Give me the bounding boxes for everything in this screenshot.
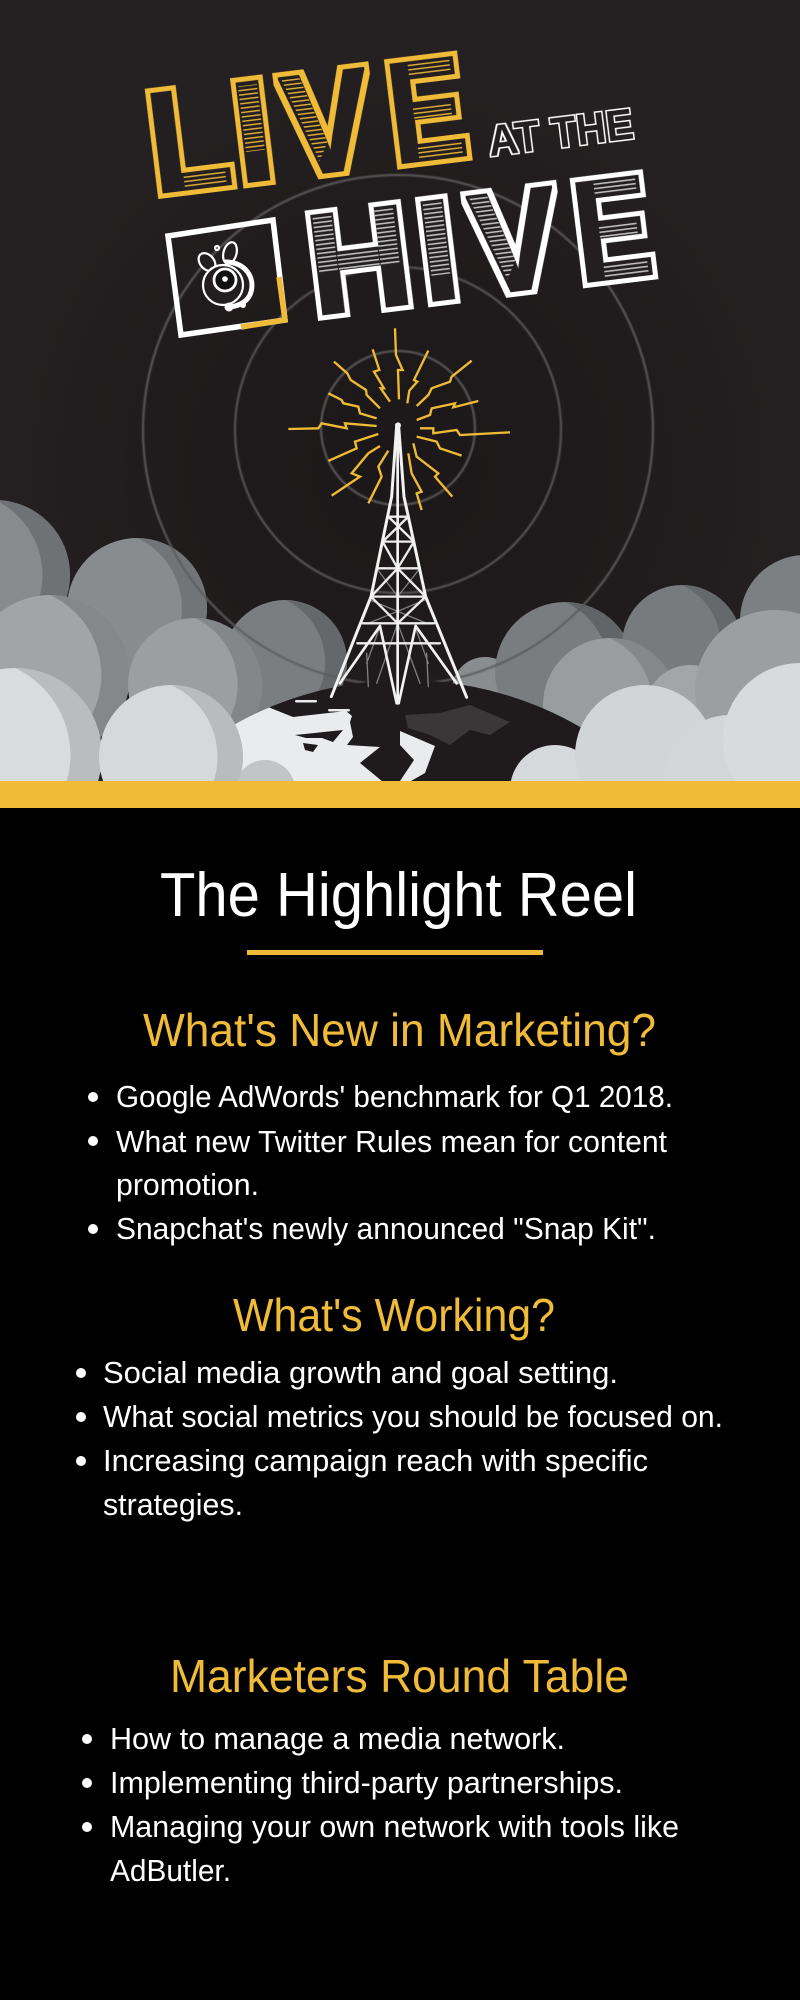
heading underline [247, 950, 543, 955]
section: Marketers Round Table [82, 1650, 679, 1888]
heading: The Highlight Reel: The Highlight Reel [160, 861, 637, 930]
clouds: middle layer [0, 595, 800, 772]
list: marketing news: Snapchat's newly announced "Snap Kit". [116, 1211, 656, 1246]
logo: LIVE: L [139, 55, 239, 224]
tower: mast and inner legs [340, 427, 457, 703]
logo: HIVE: E [565, 144, 660, 313]
list: marketing news: Google AdWords' benchmark for Q1 2018. [116, 1079, 673, 1114]
clouds: front layer [0, 663, 800, 845]
logo: HIVE: H [298, 174, 421, 346]
logo: LIVE hatching [173, 59, 463, 189]
section: What's Working [76, 1289, 723, 1522]
list: what's working: Increasing campaign reach with specific [103, 1443, 648, 1478]
logo: square frame [168, 220, 285, 335]
icon: bee [195, 241, 252, 312]
globe: black islands [295, 730, 343, 752]
list: what's working: What social metrics you should be focused on. [103, 1399, 723, 1434]
globe [235, 681, 581, 781]
globe: grey land [405, 705, 510, 745]
logo: HIVE: I [408, 168, 467, 333]
list: round table: Managing your own network with tools like [110, 1809, 679, 1844]
list: marketing news: What new Twitter Rules mean for content [116, 1124, 667, 1159]
logo: HIVE: V [462, 156, 568, 326]
logo: LIVE: V [274, 37, 380, 208]
list: round table [82, 1721, 679, 1888]
content panel: black background [0, 808, 800, 2000]
globe: white land west [235, 708, 382, 781]
list: marketing news: promotion. [116, 1167, 259, 1202]
list: what's working [76, 1355, 723, 1522]
tower: cross bars [357, 517, 440, 643]
list: what's working: Social media growth and goal setting. [103, 1355, 618, 1390]
subheading: Marketers Round Table: Marketers Round Table [170, 1650, 629, 1702]
logo: LIVE [139, 26, 474, 224]
lightning bolts [288, 328, 510, 510]
radio wave rings [143, 175, 653, 685]
logo: HIVE hatching [312, 178, 649, 312]
logo: LIVE: E [379, 26, 474, 195]
list: round table: How to manage a media network. [110, 1721, 565, 1756]
list: round table: AdButler. [110, 1853, 231, 1888]
section: What's New in Marketing [88, 1004, 673, 1246]
globe: white land south [400, 731, 435, 781]
logo: LIVE: I [223, 49, 283, 214]
radio tower [331, 422, 467, 703]
yellow divider band [0, 781, 800, 808]
subheading: What's New in Marketing: What's New in Marketing? [143, 1004, 656, 1056]
list: marketing news [88, 1079, 673, 1246]
subheading: What's Working: What's Working? [233, 1289, 555, 1341]
tower: rear struts [367, 568, 428, 687]
logo: AT THE: AT THE [485, 99, 636, 166]
list: what's working: strategies. [103, 1487, 243, 1522]
tower: legs [331, 426, 467, 697]
tower: tip [395, 422, 401, 428]
clouds: back layer [0, 500, 800, 742]
logo: HIVE [298, 144, 660, 346]
list: round table: Implementing third-party partnerships. [110, 1765, 623, 1800]
header panel: dark background [0, 0, 800, 782]
